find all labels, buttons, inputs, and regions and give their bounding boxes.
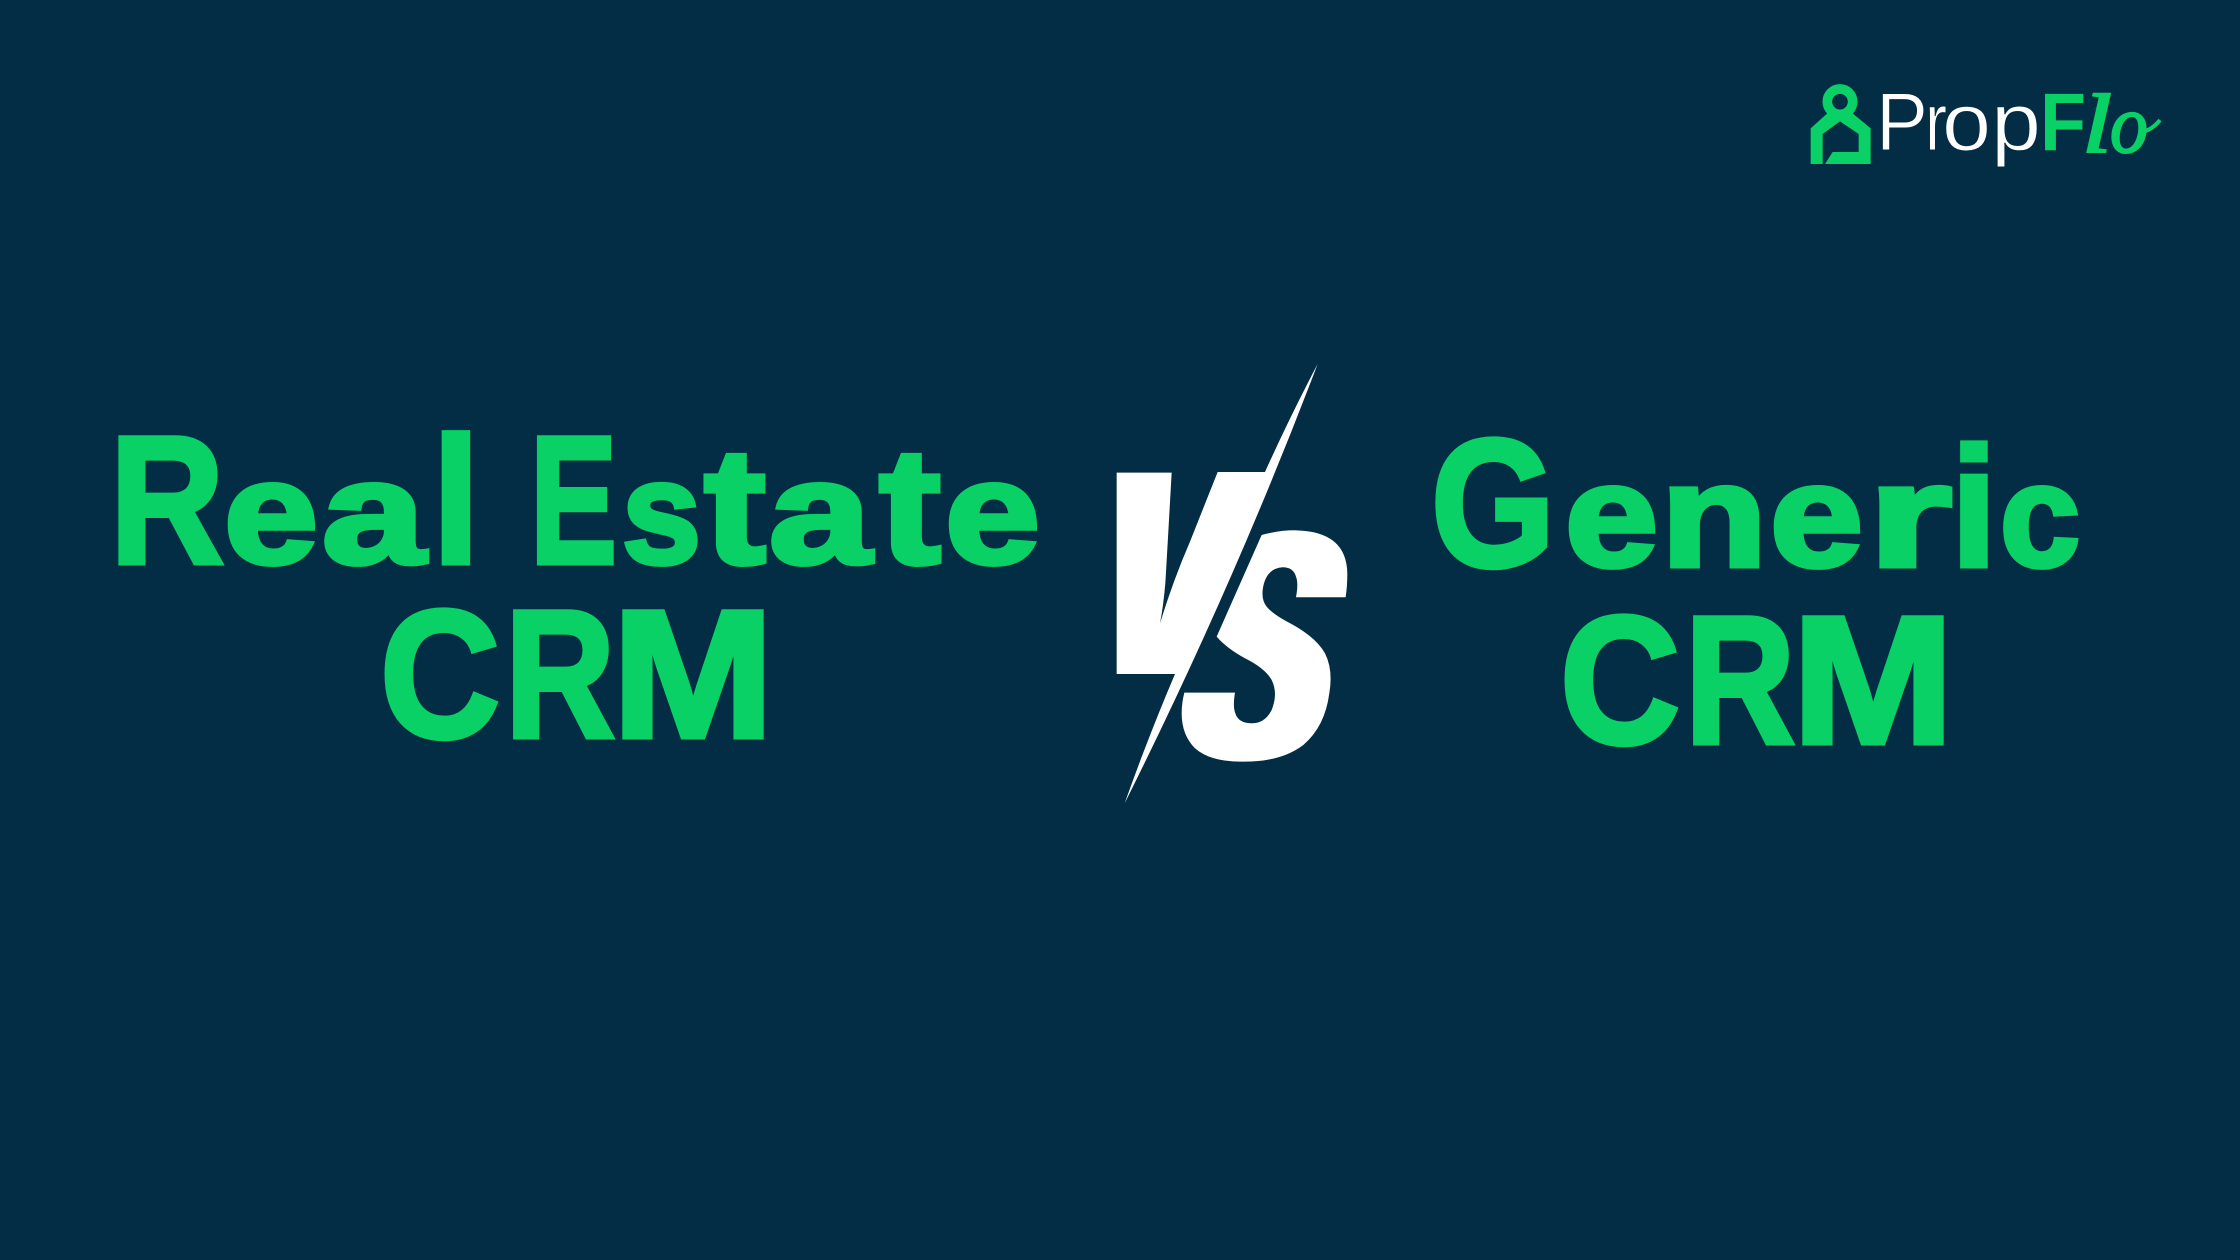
line: Generic: G <box>1431 401 1555 605</box>
line: Generic: i <box>1951 413 1997 603</box>
wordmark: P <box>1876 77 1928 168</box>
line: Real Estate: l <box>432 401 480 602</box>
line: CRM: C <box>380 572 500 776</box>
line: Real Estate: s <box>622 431 701 594</box>
wordmark: F <box>2040 77 2086 168</box>
line: Real Estate: a <box>322 431 427 594</box>
logo: PropFlo <box>1811 77 2160 171</box>
letter S <box>1182 530 1347 762</box>
line: CRM: C <box>1560 578 1680 782</box>
wordmark: r <box>1925 77 1947 168</box>
line: CRM: M <box>1792 578 1954 782</box>
line: Real Estate: R <box>110 398 224 602</box>
line: Real Estate: t <box>879 414 941 598</box>
icon: VS lightning split <box>1117 364 1347 803</box>
line: Real Estate: a <box>769 431 873 594</box>
line: Real Estate: t <box>704 414 766 598</box>
line: Real Estate: E <box>530 398 617 602</box>
line: Generic: e <box>1770 434 1863 597</box>
line: Generic: r <box>1868 434 1952 597</box>
icon: house pin <box>1811 89 1871 164</box>
wordmark: l <box>2082 78 2112 171</box>
wordmark: o <box>2110 78 2148 171</box>
line: CRM: R <box>1685 578 1795 782</box>
line: Real Estate: e <box>224 431 318 594</box>
wordmark: o <box>1942 77 1991 168</box>
wordmark: p <box>1991 77 2041 168</box>
line: Generic: n <box>1661 434 1767 597</box>
line: Generic: c <box>2000 434 2080 597</box>
heading: Generic CRM <box>1431 401 2080 782</box>
heading: Real Estate CRM <box>110 398 1040 776</box>
logo tail <box>2142 120 2160 132</box>
line: Real Estate: e <box>945 431 1040 594</box>
letter V with slash <box>1117 364 1318 803</box>
line: CRM: R <box>505 572 615 776</box>
line: Generic: e <box>1565 434 1658 597</box>
line: CRM: M <box>612 572 774 776</box>
